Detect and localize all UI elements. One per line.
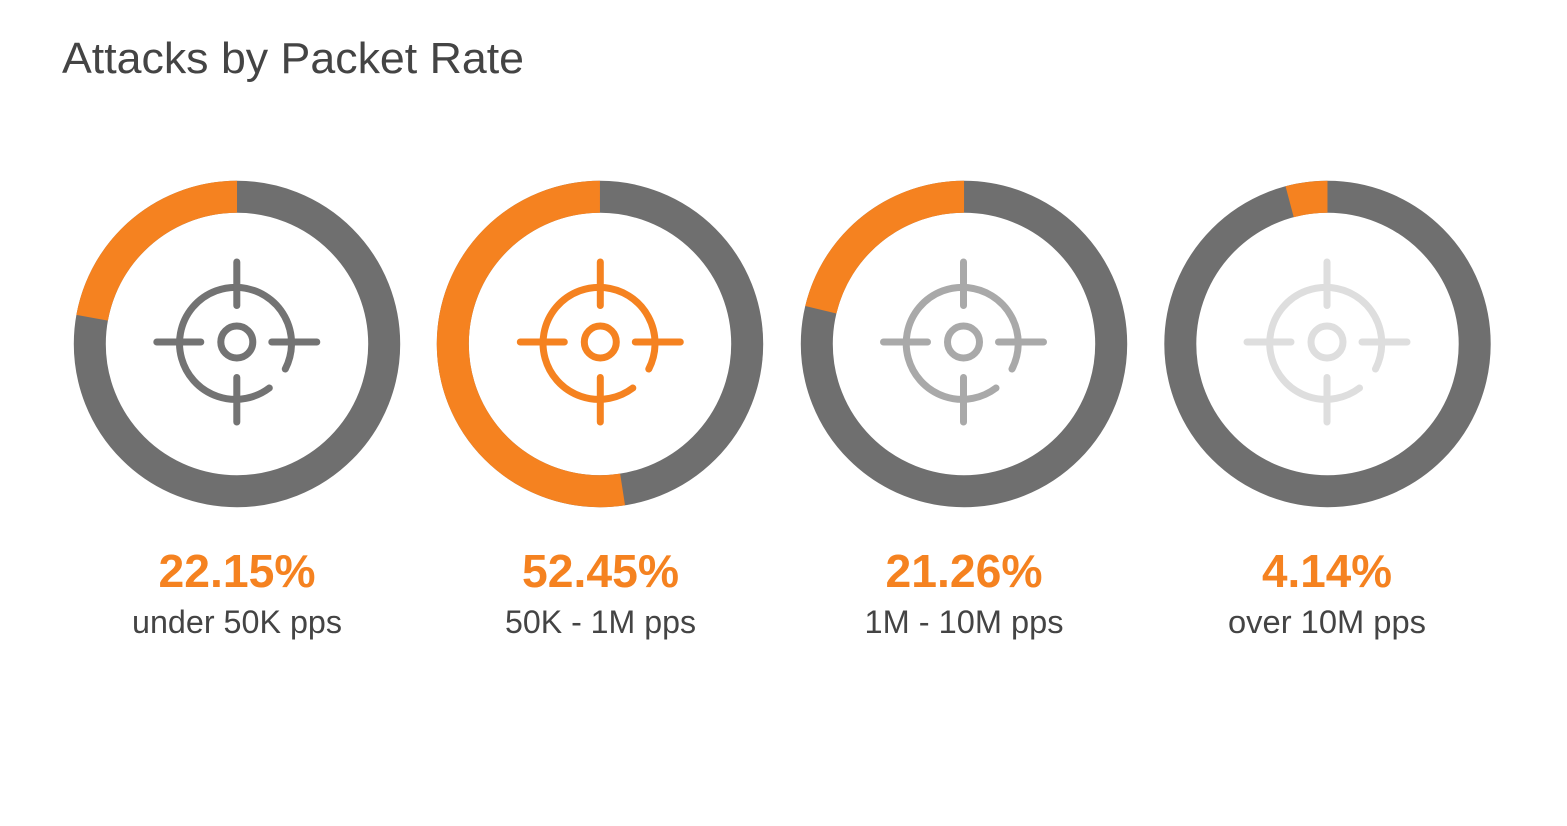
range label: over 10M pps [1228,604,1426,640]
icon: target crosshair mid grey [884,262,1044,422]
panel: 50K - 1M pps [432,176,768,640]
icon: target crosshair dark grey [157,262,317,422]
panel: 1M - 10M pps [787,167,1141,640]
donut chart: 52.45% [432,176,768,512]
percentage: 52.45% [522,545,679,597]
range label: 1M - 10M pps [864,604,1064,640]
panel: under 50K pps [66,173,408,640]
icon: target crosshair light grey [1247,262,1407,422]
range label: 50K - 1M pps [505,604,696,640]
icon: target crosshair orange [520,262,680,422]
donut chart: 22.15% [66,173,408,515]
percentage: 21.26% [886,545,1042,597]
donut chart: 21.26% [787,167,1141,521]
panel: over 10M pps [1147,164,1508,640]
range label: under 50K pps [132,604,342,640]
percentage: 22.15% [158,545,316,597]
percentage: 4.14% [1262,545,1392,597]
title: Attacks by Packet Rate [62,34,524,83]
donut chart: 4.14% [1147,164,1508,524]
